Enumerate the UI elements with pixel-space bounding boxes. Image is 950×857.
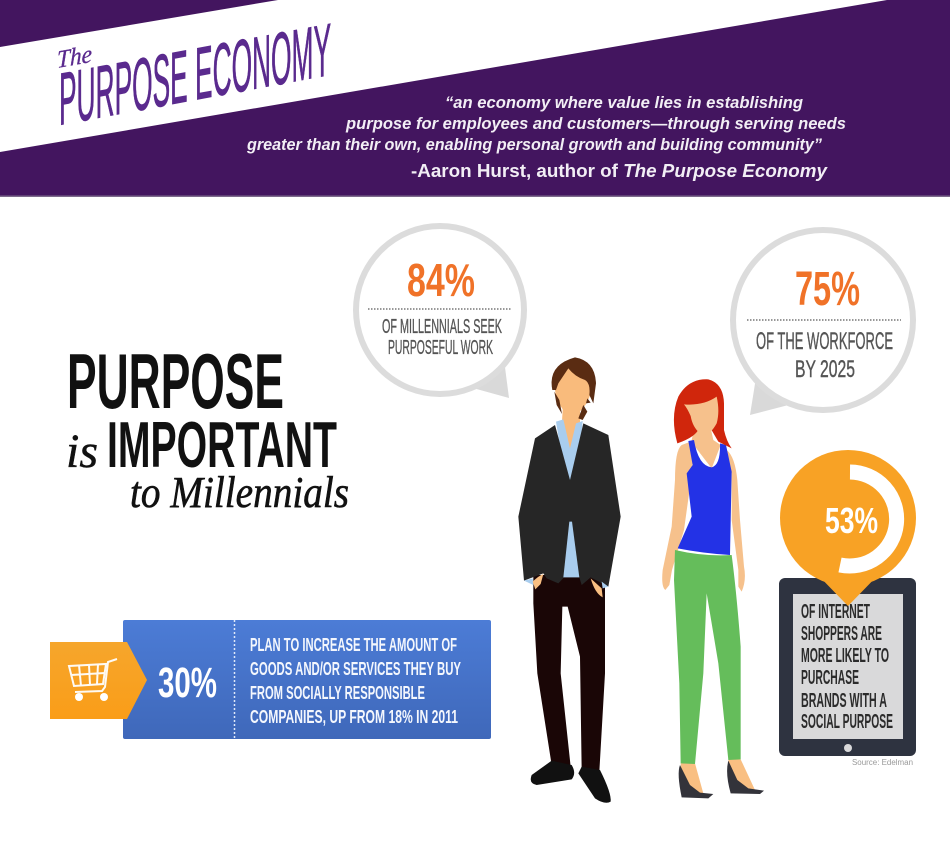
stat description: PLAN TO INCREASE THE AMOUNT OF xyxy=(250,634,457,655)
figure: woman with red hair xyxy=(662,379,764,798)
callout: 53% orange pin: 53% xyxy=(825,500,878,541)
speech bubble: 84%: PURPOSEFUL WORK xyxy=(388,337,493,359)
speech bubble: 75% xyxy=(733,230,913,415)
heading: Purpose is important to millennials: is xyxy=(66,425,98,478)
tablet text: OF INTERNET xyxy=(801,601,870,623)
speech bubble: 84% xyxy=(356,226,524,398)
panel: 30% statistic xyxy=(50,620,491,739)
figure: man in suit xyxy=(518,357,621,803)
tablet text xyxy=(801,601,893,733)
stat description: GOODS AND/OR SERVICES THEY BUY xyxy=(250,658,461,679)
title: The Purpose Economy: The xyxy=(57,41,92,74)
title: The Purpose Economy xyxy=(57,7,331,141)
quote text: -Aaron Hurst, author of The Purpose Economy xyxy=(411,161,828,181)
heading: Purpose is important to millennials: PURPOSE xyxy=(67,337,284,425)
stat: 30%: 30% xyxy=(158,659,217,707)
stat description: FROM SOCIALLY RESPONSIBLE xyxy=(250,682,425,703)
source note: Source: Edelman xyxy=(852,758,913,767)
panel: header banner xyxy=(0,0,950,197)
heading: Purpose is important to millennials: IMPORTANT xyxy=(107,408,337,481)
icon: tablet xyxy=(779,578,916,756)
heading: Purpose is important to millennials xyxy=(66,337,349,517)
heading: Purpose is important to millennials: to Millennials xyxy=(130,468,349,517)
stat description xyxy=(250,634,461,727)
stat description: COMPANIES, UP FROM 18% IN 2011 xyxy=(250,706,458,727)
icon: shopping cart on orange arrow xyxy=(50,642,147,719)
quote text: greater than their own, enabling personal growth and building community” xyxy=(246,136,823,154)
speech bubble: 75%: BY 2025 xyxy=(795,356,855,383)
speech bubble: 84%: OF MILLENNIALS SEEK xyxy=(382,316,502,338)
quote text: “an economy where value lies in establishing xyxy=(445,94,803,112)
quote text: purpose for employees and customers—through serving needs xyxy=(345,115,846,133)
tablet text: PURCHASE xyxy=(801,667,859,689)
quote text xyxy=(246,94,846,181)
speech bubble: 75%: 75% xyxy=(795,263,860,316)
callout: 53% orange pin xyxy=(780,450,916,606)
speech bubble: 84%: 84% xyxy=(407,254,475,306)
